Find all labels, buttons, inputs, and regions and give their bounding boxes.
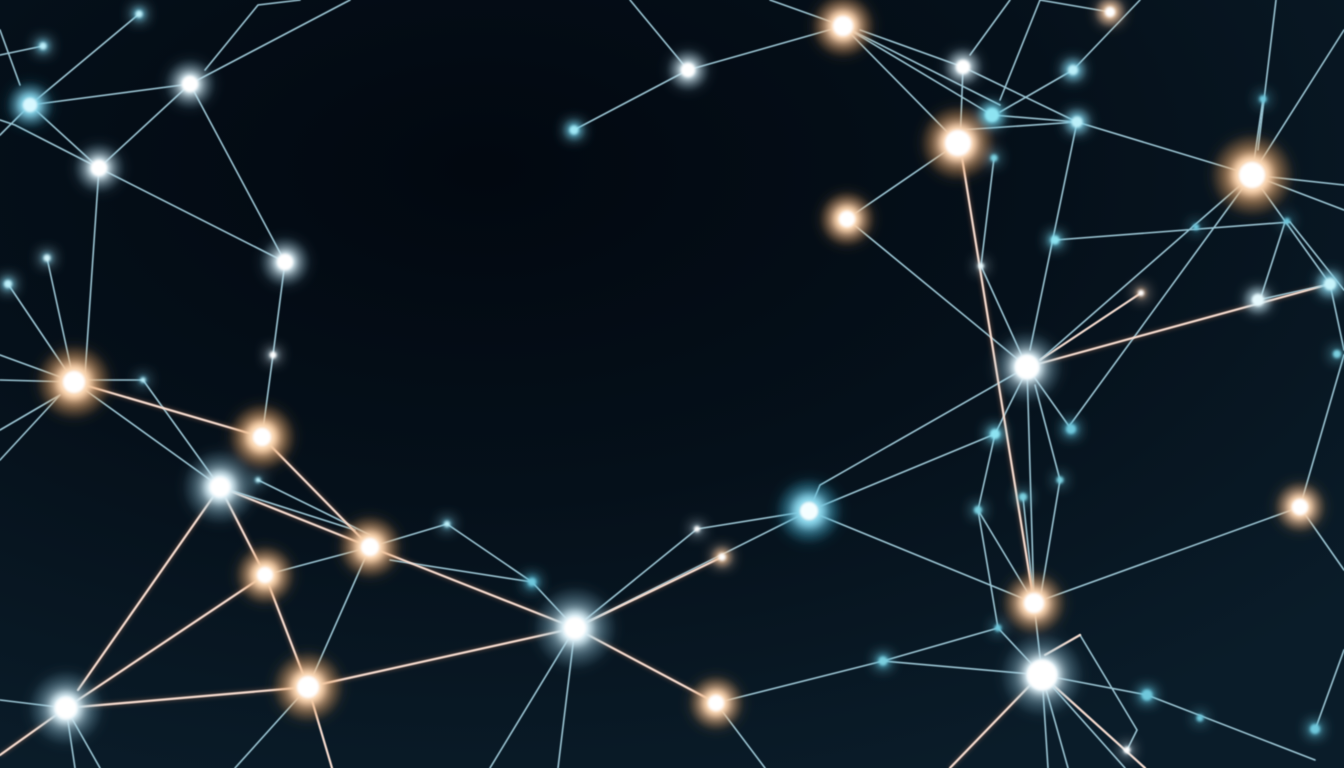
nodes: top centre cluster [562, 0, 1126, 247]
nodes: lower left cluster [28, 344, 542, 746]
nodes: centre cluster [533, 477, 893, 731]
nodes: upper left cluster [0, 4, 311, 387]
nodes: right cluster [974, 92, 1344, 533]
nodes: lower right cluster [971, 474, 1324, 758]
